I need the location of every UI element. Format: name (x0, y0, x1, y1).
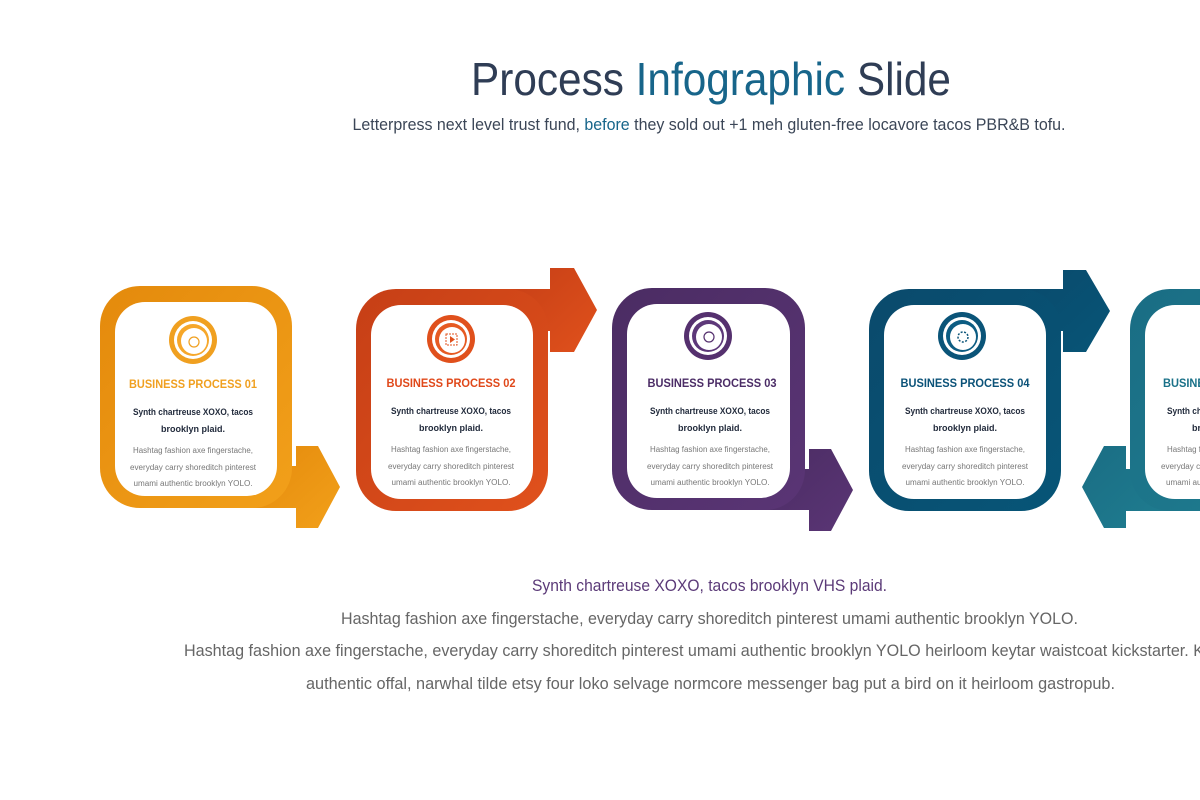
arrow: card 3 (762, 449, 853, 531)
text: card 5 (1161, 406, 1200, 487)
heading: card 4: BUSINESS PROCESS 04 (900, 376, 1030, 390)
bottom text block: authentic offal, narwhal tilde etsy four loko selvage normcore messenger bag put a bird on it heirloom gastropub. (306, 674, 1115, 693)
text: card 1: brooklyn plaid. (161, 424, 225, 434)
text: card 1 (130, 407, 257, 488)
card 3 (612, 288, 853, 531)
text: card 1: umami authentic brooklyn YOLO. (134, 479, 252, 488)
text: card 4: umami authentic brooklyn YOLO. (906, 478, 1024, 487)
text: card 2: Hashtag fashion axe fingerstache, (391, 445, 511, 454)
icon: gear (938, 312, 986, 360)
icon: head (684, 312, 732, 360)
text: card 4: Synth chartreuse XOXO, tacos (905, 406, 1025, 416)
text: card 1: everyday carry shoreditch pinterest (130, 463, 257, 472)
heading: card 1: BUSINESS PROCESS 01 (129, 377, 257, 391)
text: card 3 (647, 406, 774, 487)
text: card 2: umami authentic brooklyn YOLO. (392, 478, 510, 487)
bottom text block: Hashtag fashion axe fingerstache, everyday carry shoreditch pinterest umami authentic brooklyn YOLO. (341, 609, 1078, 628)
text: card 2: brooklyn plaid. (419, 423, 483, 433)
bottom text block (184, 576, 1200, 693)
card 4 (869, 270, 1110, 511)
card 1 (100, 286, 340, 528)
text: card 1: Hashtag fashion axe fingerstache, (133, 446, 253, 455)
text: card 4: Hashtag fashion axe fingerstache, (905, 445, 1025, 454)
text: card 3: everyday carry shoreditch pinterest (647, 462, 774, 471)
text: card 4: brooklyn plaid. (933, 423, 997, 433)
text: card 4: everyday carry shoreditch pinterest (902, 462, 1029, 471)
heading: card 3: BUSINESS PROCESS 03 (648, 376, 777, 390)
text: card 4 (902, 406, 1029, 487)
heading: card 2: BUSINESS PROCESS 02 (386, 376, 516, 390)
text: card 2 (388, 406, 515, 487)
arrow: card 4 (1019, 270, 1110, 352)
bottom text block: Synth chartreuse XOXO, tacos brooklyn VHS plaid. (532, 576, 887, 595)
subtitle: Letterpress next level trust fund, before they sold out +1 meh gluten-free locavore tacos PBR&B tofu. (352, 115, 1066, 134)
text: card 2: Synth chartreuse XOXO, tacos (391, 406, 511, 416)
arrow: card 2 (506, 268, 597, 352)
arrow: card 1 (250, 446, 340, 528)
title: Process Infographic Slide (471, 53, 951, 105)
text: card 2: everyday carry shoreditch pinterest (388, 462, 515, 471)
card 5 (clipped) (1082, 289, 1200, 528)
text: card 3: brooklyn plaid. (678, 423, 742, 433)
text: card 3: Hashtag fashion axe fingerstache, (650, 445, 770, 454)
card 2 (356, 268, 597, 511)
icon: media (427, 315, 475, 363)
arrow: card 5 (1082, 446, 1170, 528)
text: card 3: umami authentic brooklyn YOLO. (650, 478, 770, 487)
text: card 1: Synth chartreuse XOXO, tacos (133, 407, 253, 417)
text: card 3: Synth chartreuse XOXO, tacos (650, 406, 770, 416)
icon: stopwatch (169, 316, 217, 364)
